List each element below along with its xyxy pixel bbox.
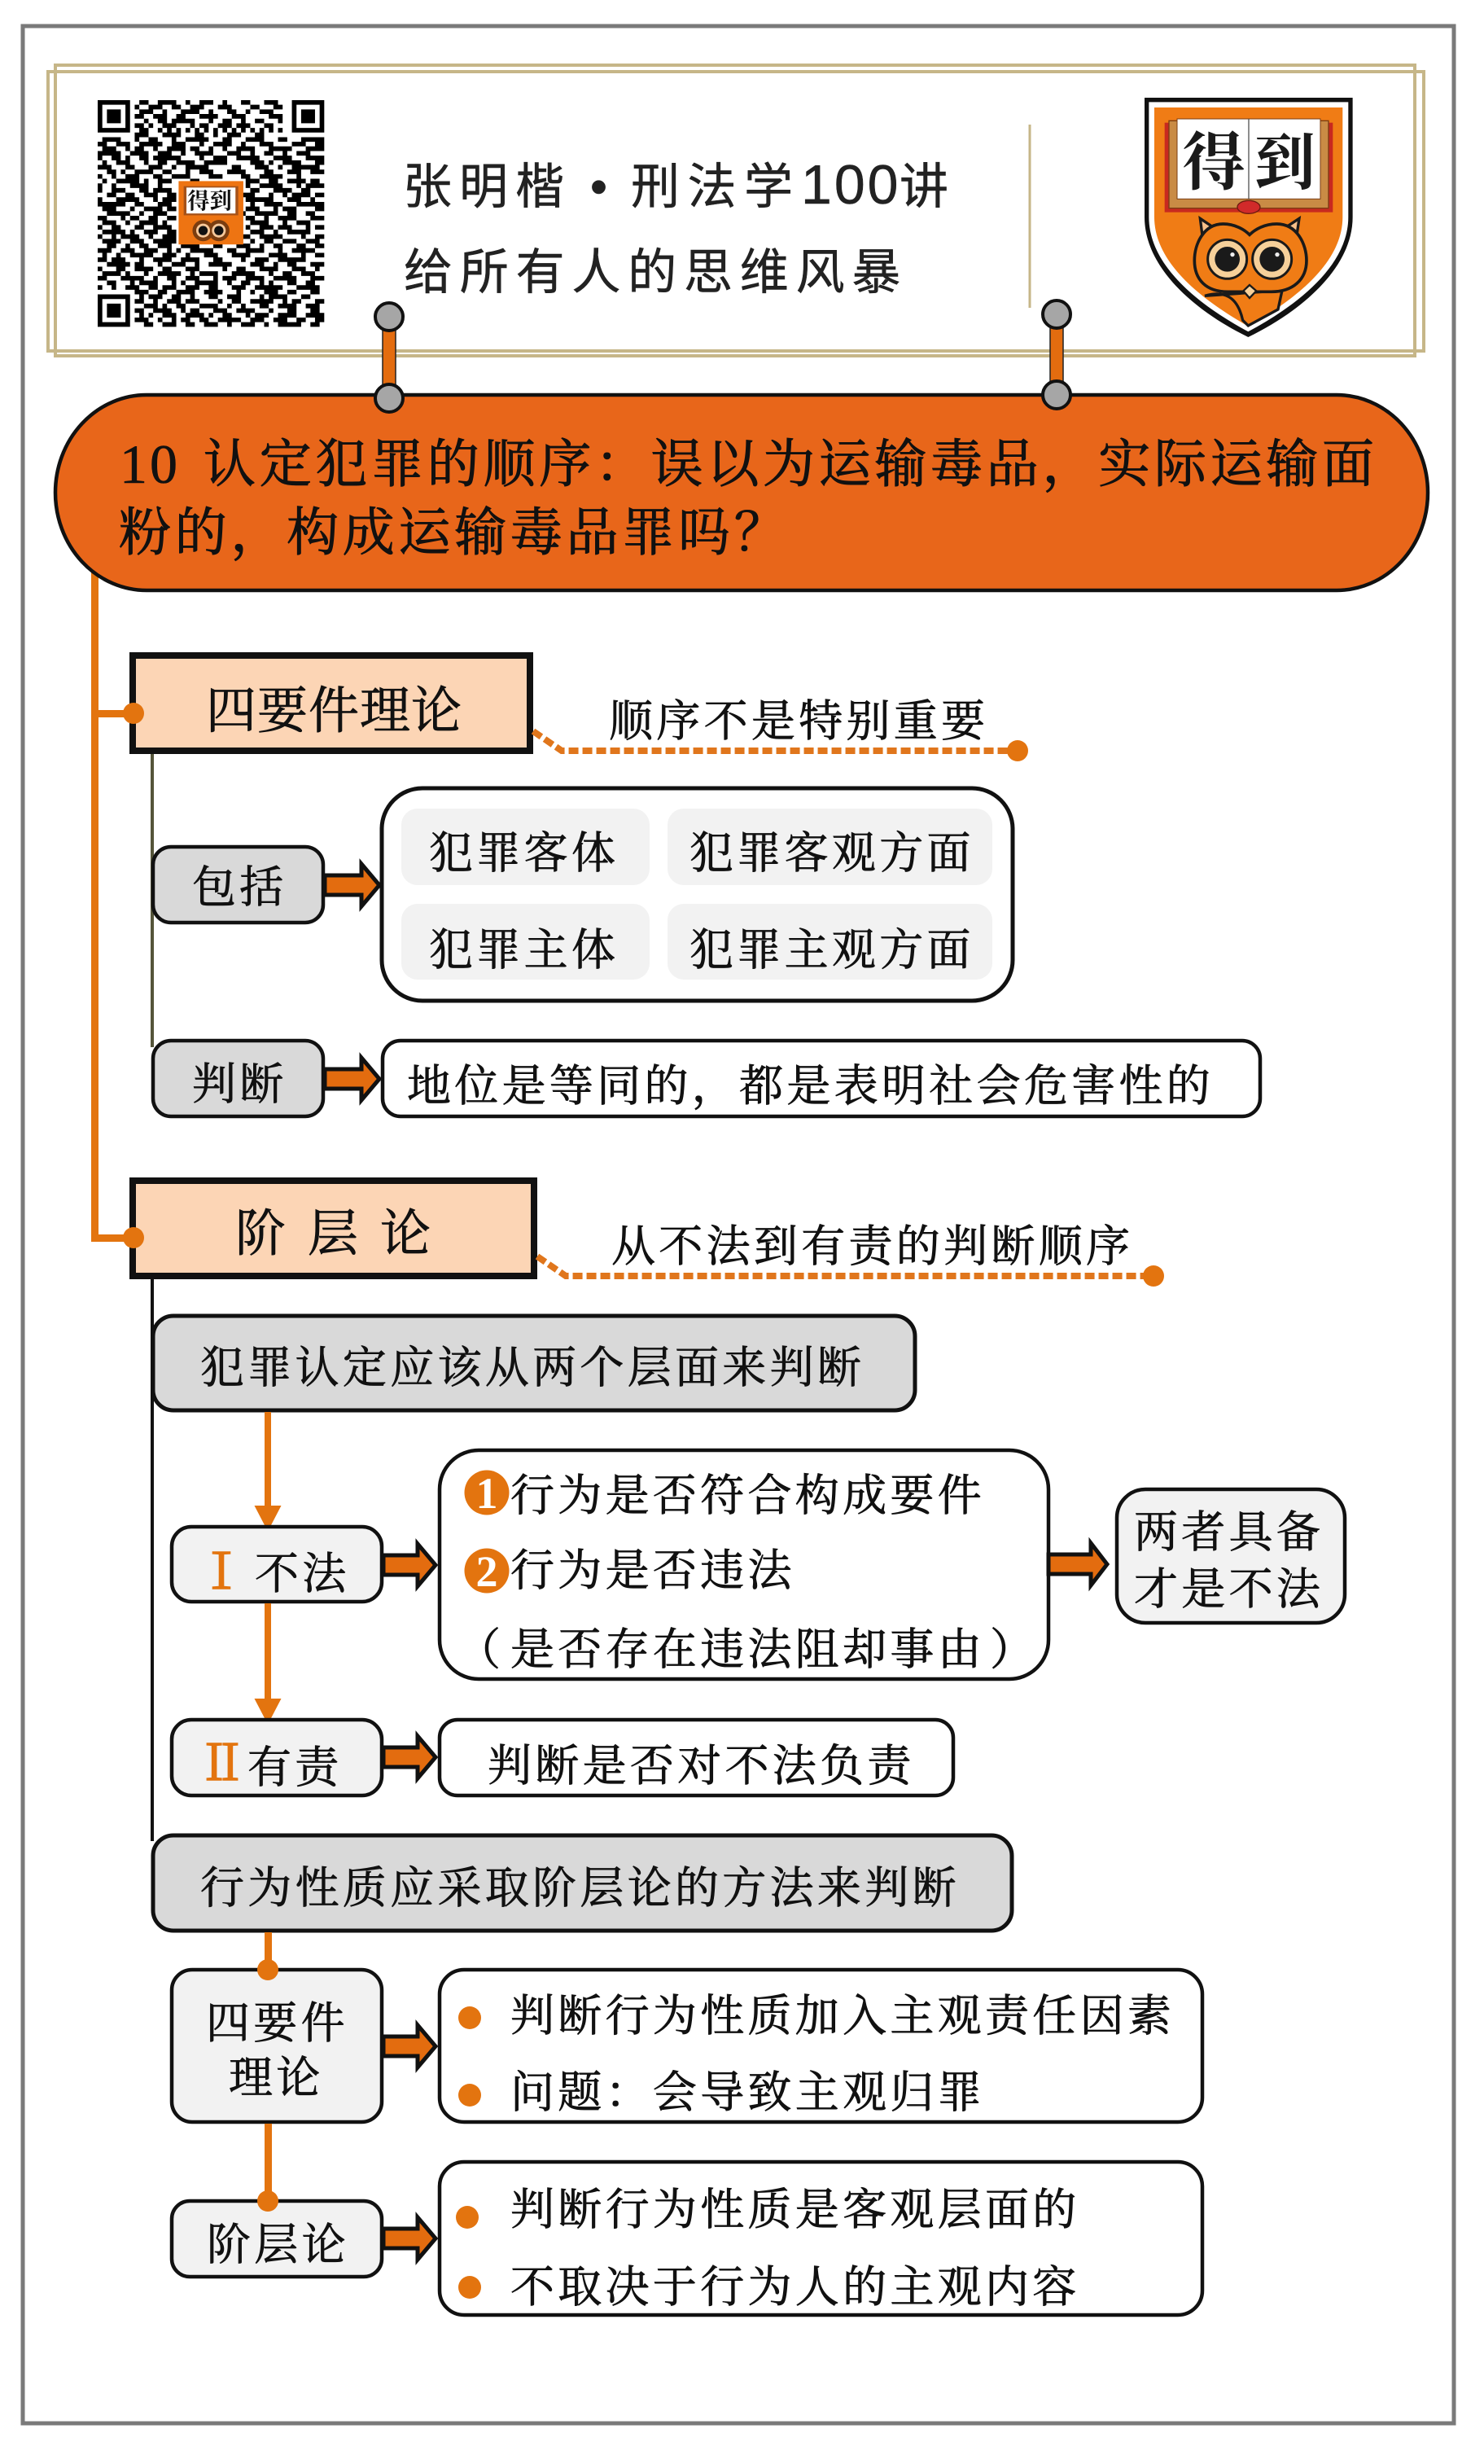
panel: stage theory points (440, 2162, 1202, 2315)
node: stage theory (172, 2201, 382, 2277)
course title text: 100 (801, 154, 900, 216)
cell: objective aspect: 犯罪客观方面 (689, 829, 974, 878)
badge 2: 2 (475, 1547, 498, 1596)
dark sub trunk for four-element section (151, 754, 154, 1047)
cell: objective aspect (668, 809, 992, 885)
orange connector (265, 1932, 272, 1970)
main title pill (55, 395, 1428, 590)
dark sub trunk for stage theory section (151, 1279, 154, 1841)
orange arrow down (254, 1603, 282, 1718)
step I: illegality (172, 1527, 382, 1603)
arrow (325, 864, 379, 906)
QR code: 得到 (187, 189, 232, 213)
orange connector (265, 2124, 272, 2201)
cell: subjective aspect (668, 904, 992, 980)
badge 2 (464, 1547, 510, 1596)
course title text: 张明楷 (403, 160, 571, 214)
panel: stage theory points: 判断行为性质是客观层面的 (510, 2186, 1080, 2234)
orange trunk line (91, 570, 98, 1242)
course title text: 刑法学 (631, 160, 801, 214)
panel: four elements (382, 788, 1013, 1001)
connector dot (257, 2190, 278, 2212)
panel: stage theory points: 不取决于行为人的主观内容 (510, 2263, 1080, 2312)
result box: both required (1117, 1489, 1345, 1623)
course title text: 讲 (900, 160, 948, 214)
bullet (458, 2084, 481, 2107)
arrow (383, 2217, 436, 2260)
note with dashed leader: order not important: 顺序不是特别重要 (609, 697, 988, 746)
cell: crime subject (401, 904, 650, 980)
course title text: • (590, 160, 607, 214)
logo: dedao shield with book and owl (1145, 98, 1353, 337)
arrow (383, 1544, 436, 1586)
text box: judge responsibility (440, 1720, 953, 1795)
arrow (325, 1058, 379, 1100)
course title text (403, 154, 948, 300)
arrow (383, 2025, 436, 2067)
cell: crime object: 犯罪客体 (429, 829, 619, 878)
step II: responsibility: 有责 (247, 1743, 343, 1792)
logo: dedao shield with book and owl: 到 (1254, 115, 1315, 202)
node: four element theory: 四要件 (206, 1999, 348, 2048)
panel: illegality criteria: ） (990, 1625, 1037, 1674)
step II: responsibility: Ⅱ (198, 1725, 247, 1795)
heading box: nature of conduct (153, 1835, 1012, 1931)
badge 1: 1 (475, 1469, 498, 1518)
node: four element theory (172, 1970, 382, 2122)
connector: left ring on pill (375, 384, 403, 412)
heading box: nature of conduct: 行为性质应采取阶层论的方法来判断 (200, 1864, 960, 1913)
panel: illegality criteria: （ (457, 1625, 504, 1674)
panel: illegality criteria: 行为是否违法 (510, 1546, 795, 1595)
node: four element theory: 理论 (229, 2054, 324, 2102)
connector: left ring (375, 303, 403, 388)
result box: both required: 才是不法 (1134, 1565, 1324, 1614)
connector dot (257, 1959, 278, 1980)
note with dashed leader: order not important (533, 697, 1028, 761)
text box: equal status (383, 1041, 1260, 1116)
course title text: 给所有人的思维风暴 (404, 245, 908, 300)
panel: illegality criteria: 行为是否符合构成要件 (510, 1471, 985, 1520)
logo: dedao shield with book and owl: 得 (1183, 112, 1245, 203)
section heading: four element theory (92, 655, 530, 751)
label: judgement: 判断 (192, 1060, 287, 1109)
connector: right ring (1043, 300, 1070, 409)
bullet (456, 2206, 479, 2229)
QR code (98, 100, 324, 327)
heading box: two levels: 犯罪认定应该从两个层面来判断 (200, 1344, 865, 1392)
step I: illegality: 不法 (255, 1550, 350, 1598)
cell: crime subject: 犯罪主体 (429, 926, 619, 975)
section heading: stage theory: 阶层论 (235, 1207, 453, 1262)
panel: four element theory points: 判断行为性质加入主观责任因素 (510, 1992, 1175, 2041)
header panel (48, 65, 1424, 356)
text box: equal status: 地位是等同的，都是表明社会危害性的 (407, 1062, 1214, 1111)
cell: crime object (401, 809, 650, 885)
panel: illegality criteria: 是否存在违法阻却事由 (510, 1625, 985, 1674)
panel: four element theory points (440, 1970, 1202, 2122)
panel: four element theory points: 问题：会导致主观归罪 (510, 2068, 985, 2117)
result box: both required: 两者具备 (1134, 1508, 1324, 1557)
cell: subjective aspect: 犯罪主观方面 (689, 926, 974, 975)
node: stage theory: 阶层论 (207, 2221, 349, 2269)
main title pill: 粉的，构成运输毒品罪吗？ (119, 504, 790, 562)
vertical divider (1029, 125, 1031, 308)
bullet (458, 2276, 481, 2299)
step II: responsibility (172, 1720, 382, 1795)
panel: illegality criteria (440, 1450, 1048, 1679)
text box: judge responsibility: 判断是否对不法负责 (488, 1742, 915, 1791)
arrow (1048, 1543, 1107, 1585)
heading box: two levels (153, 1316, 915, 1410)
label: judgement (153, 1041, 323, 1116)
step I: illegality: Ⅰ (197, 1533, 246, 1603)
section heading: stage theory (92, 1181, 534, 1276)
badge 1 (464, 1469, 510, 1518)
label: includes: 包括 (192, 863, 287, 912)
main title pill: 10 (120, 433, 180, 495)
section heading: four element theory: 四要件理论 (206, 684, 462, 739)
gold double frame (48, 65, 1424, 356)
main title pill: 认定犯罪的顺序：误以为运输毒品，实际运输面 (204, 436, 1378, 493)
arrow (383, 1736, 436, 1778)
note with dashed leader: from illegality to responsibility (537, 1222, 1164, 1287)
label: includes (153, 847, 323, 923)
note with dashed leader: from illegality to responsibility: 从不法到有责的判断顺序 (611, 1222, 1133, 1271)
orange arrow down (254, 1412, 282, 1525)
bullet (458, 2006, 481, 2029)
